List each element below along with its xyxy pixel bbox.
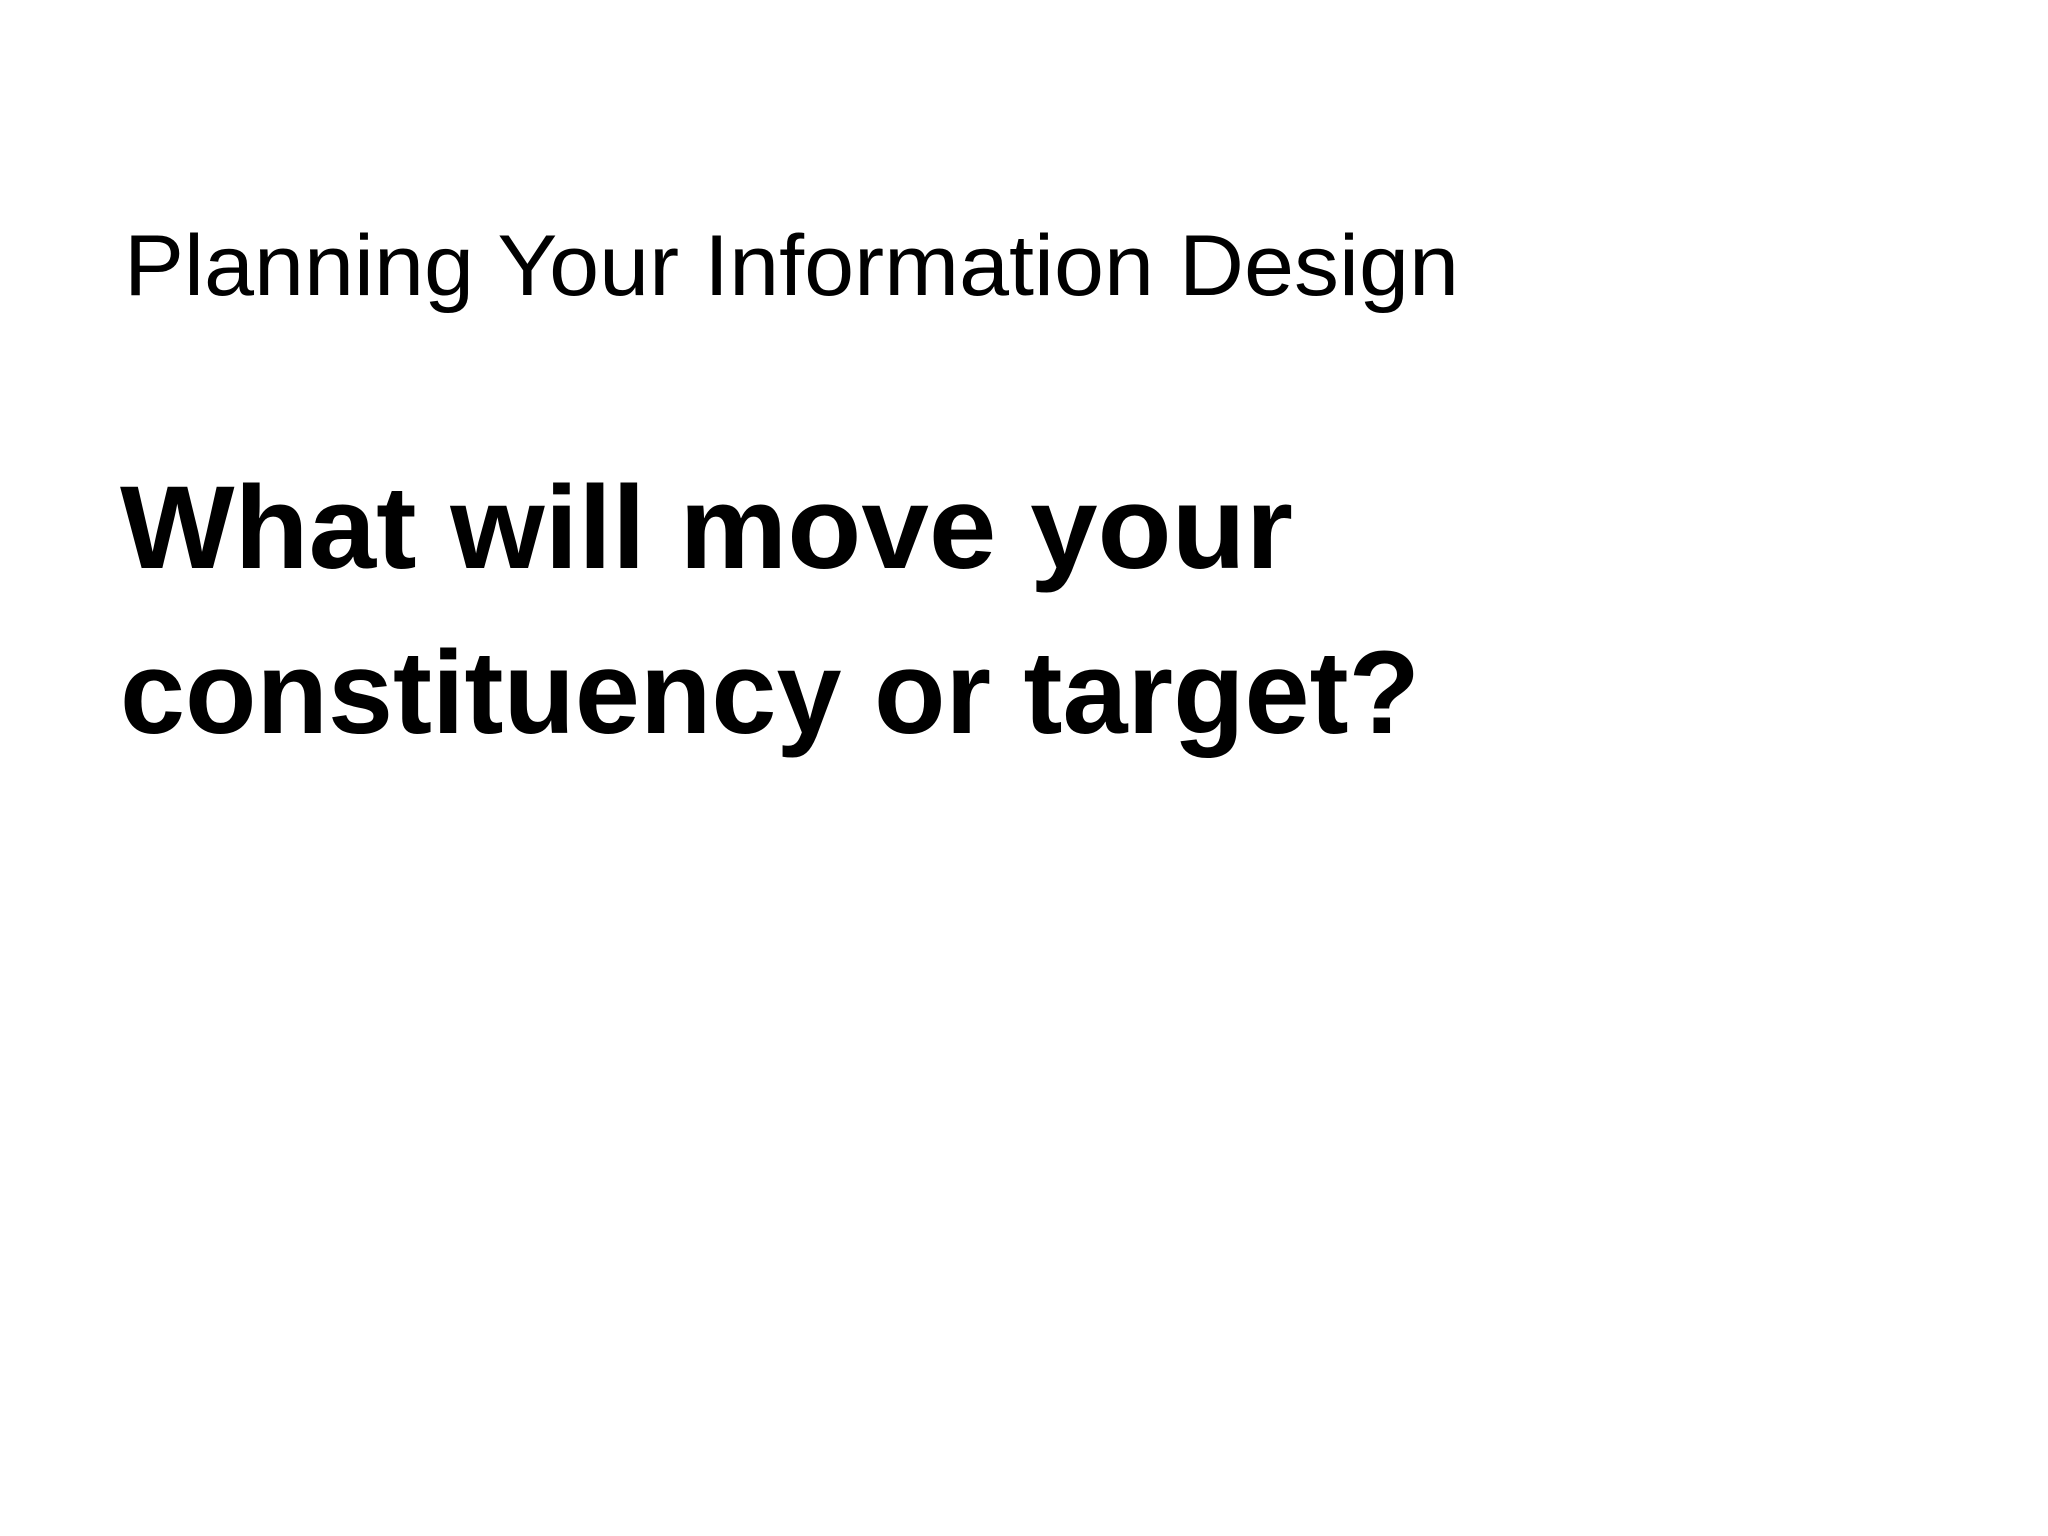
- heading: question: What will move your: [120, 462, 1293, 594]
- heading: question: constituency or target?: [120, 627, 1420, 759]
- heading: question: [120, 462, 1420, 759]
- title: Planning Your Information Design: [124, 218, 1459, 314]
